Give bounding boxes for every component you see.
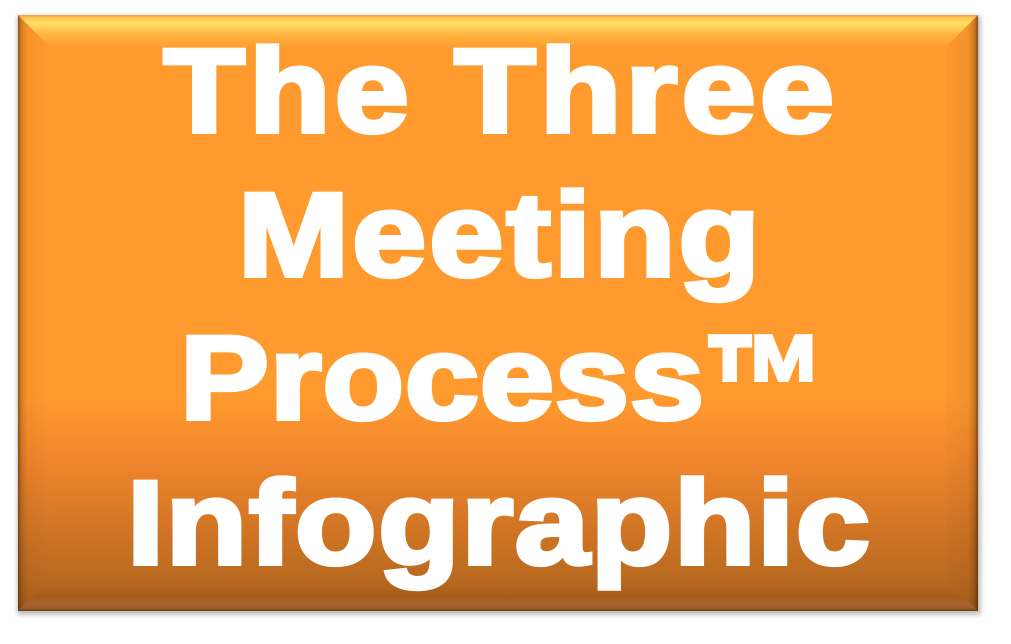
trademark mark: ™ (702, 306, 826, 462)
title line 1: The Three (164, 24, 834, 157)
title line 3: Process (180, 311, 704, 444)
title line 2: Meeting (238, 168, 760, 301)
title (127, 24, 870, 589)
title line 4: Infographic (127, 456, 870, 589)
